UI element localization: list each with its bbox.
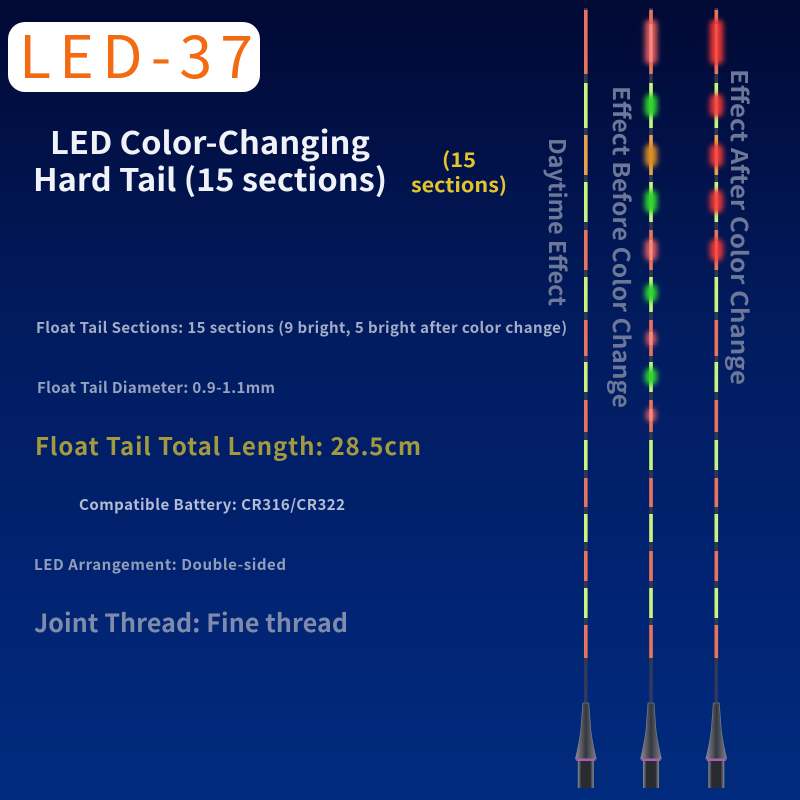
spec: joint thread: Joint Thread: Fine thread <box>34 604 348 640</box>
heading: LED Color-Changing <box>50 118 370 163</box>
float tail: before color change <box>640 8 662 788</box>
light cores <box>650 24 652 421</box>
spec: diameter: Float Tail Diameter: 0.9-1.1mm <box>37 377 275 398</box>
spec: total length: Float Tail Total Length: 28.5cm <box>35 427 421 462</box>
spec: LED arrangement: LED Arrangement: Double-sided <box>34 554 286 575</box>
spec: float tail sections: Float Tail Sections: 15 sections (9 bright, 5 bright after color change) <box>36 317 567 338</box>
float tail: after color change <box>706 8 727 788</box>
yellow note <box>411 144 507 198</box>
light cores <box>715 24 718 259</box>
glow lights <box>710 20 723 261</box>
yellow note: sections) <box>411 169 507 198</box>
yellow note: (15 <box>442 144 476 173</box>
heading: Hard Tail (15 sections) <box>33 155 387 200</box>
heading <box>33 118 387 200</box>
label: after color change: Effect After Color Change <box>724 69 758 385</box>
float tail: daytime <box>575 8 596 788</box>
glow lights <box>645 20 657 422</box>
label: daytime effect: Daytime Effect <box>542 138 576 306</box>
spec: battery: Compatible Battery: CR316/CR322 <box>79 494 345 515</box>
model badge: LED-37 <box>19 10 253 95</box>
label: before color change: Effect Before Color Change <box>606 86 640 408</box>
